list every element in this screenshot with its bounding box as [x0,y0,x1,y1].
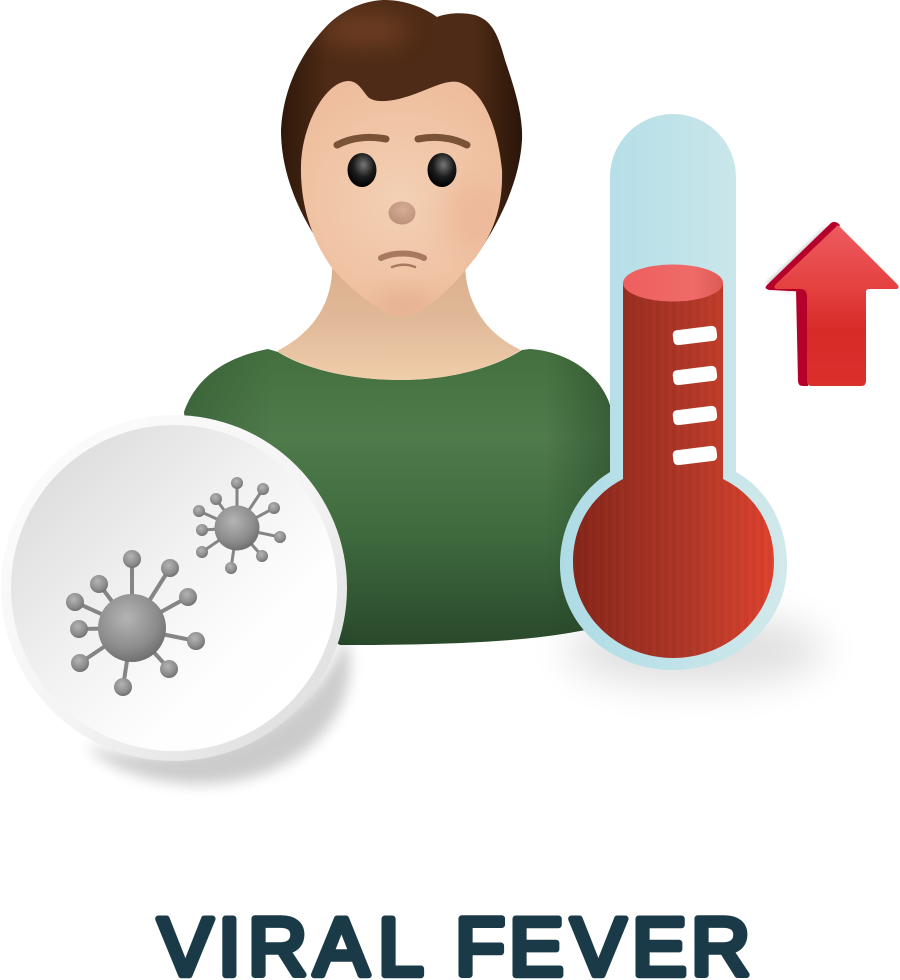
temperature ticks [672,325,718,466]
virus badge [1,415,347,761]
mouth [381,254,424,258]
face [301,81,502,318]
glass tube [560,114,787,670]
badge rim [1,415,347,761]
shirt [184,349,625,645]
badge shadow [85,635,350,784]
thermometer ground shadow [565,614,825,686]
thermometer [560,114,787,670]
left eyebrow [337,137,386,145]
person [184,0,625,645]
left eye [348,153,376,187]
hair [281,0,522,270]
lower lip crease [392,265,415,267]
arrow up [766,222,899,386]
badge face [11,425,337,751]
neck [277,262,521,380]
right eyebrow [418,137,467,145]
right eye [428,153,456,187]
large virus [66,550,205,696]
mercury [573,264,774,658]
nose [388,202,416,224]
small virus [193,477,286,574]
